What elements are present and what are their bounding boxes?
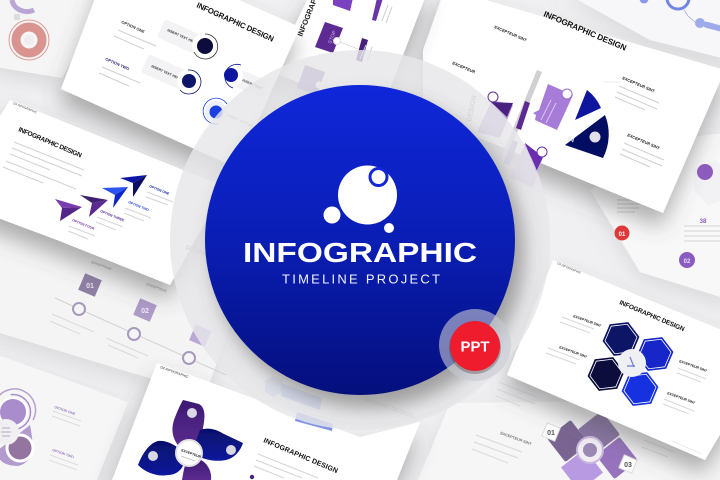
item: insert text four: INSERT TEXT HE: [227, 113, 254, 128]
item: insert text three: [219, 63, 269, 98]
panel: timeline slide: EXCEPTEUR: [91, 260, 113, 271]
timeline captions: [50, 314, 148, 358]
option labels: OPTION TWO: [128, 200, 150, 212]
item: insert text three: INSERT TEXT: [242, 78, 264, 91]
panel: stop slide: [272, 0, 428, 115]
slide label: D4 INFOGRAPHIC: [13, 101, 39, 115]
option labels: OPTION FOUR: [72, 218, 95, 231]
item: insert text two: INSERT TEXT HERE: [151, 64, 182, 81]
title: INFOGRAPHIC: [243, 237, 477, 268]
captions: EXCEPTEUR SINT: [679, 359, 709, 373]
flower diagram: EXCEPTEUR: [181, 448, 202, 459]
heading: excepteur top: EXCEPTEUR SINT: [494, 24, 528, 43]
faded shapes beneath halo: DESIGN: [466, 95, 479, 122]
purple callout upper left: [477, 92, 513, 138]
arrow two: [80, 195, 108, 217]
text: lower pie caption: EXCEPTEUR SINT: [627, 132, 661, 151]
option one text: OPTION ONE: [121, 19, 146, 34]
captions: [559, 314, 709, 405]
panel: flower slide: [112, 363, 420, 480]
option one text: [114, 19, 156, 49]
step badge 01: 01: [86, 283, 94, 290]
circular halo: [170, 50, 550, 430]
panel: right-side light slide: 02: [684, 259, 691, 265]
option two text: [99, 56, 140, 86]
purple callout right: [533, 84, 573, 130]
bullet: [250, 475, 254, 479]
panel: timeline slide: EXCEPTEUR: [146, 282, 168, 293]
panel: hexagon slide: [507, 260, 720, 460]
subtitle: TIMELINE PROJECT: [282, 272, 440, 286]
flower diagram: [138, 400, 243, 480]
petal: left: [138, 441, 184, 476]
top tile: [333, 0, 353, 11]
page mark: [672, 441, 702, 454]
central strip: [497, 70, 542, 170]
text: upper pie caption: EXCEPTEUR SINT: [622, 75, 656, 94]
option labels: OPTION ONE: [149, 184, 171, 196]
panel: right slide with pie chart: [423, 0, 720, 213]
panel: faded top-left slide: [0, 0, 110, 78]
faded shapes beneath halo: RAPHIC: [184, 243, 217, 261]
faded shapes beneath halo: [184, 95, 479, 431]
options text: OPTION TWO: [52, 448, 75, 459]
heading: excepteur left: EXCEPTEUR: [452, 60, 476, 75]
arrow three: [102, 187, 128, 208]
item: insert text one: [157, 19, 218, 59]
captions: EXCEPTEUR SINT: [573, 314, 603, 328]
text block: [3, 142, 84, 189]
faded shapes beneath halo: GRAPHIC DESIGN: [362, 396, 414, 420]
item: insert text one: INSERT TEXT HERE: [167, 28, 198, 45]
badge: PPT: PPT: [460, 338, 490, 356]
badge: PPT: [439, 309, 511, 381]
timeline line: [55, 298, 226, 375]
panel: top-left option slide: [61, 0, 300, 168]
panel: faded bottom-left ring slide: [0, 352, 128, 480]
panel: right-side light slide: [590, 132, 720, 300]
panel: right-side light slide: 01: [619, 232, 626, 238]
item: insert text two: [141, 54, 201, 94]
petal: bottom: [182, 458, 211, 480]
panel: faded squares slide: [418, 382, 720, 480]
petal: right: [195, 429, 243, 461]
step badge 01: [78, 273, 102, 297]
main circle shadow: [212, 96, 524, 408]
pie chart: 04: [566, 136, 575, 145]
squares diagram: 01: [547, 430, 555, 437]
captions: EXCEPTEUR SINT: [667, 391, 697, 405]
step badge 02: 02: [141, 308, 149, 315]
slide title: INFOGRAPHIC DESIGN: [618, 299, 686, 333]
squares diagram: 03: [624, 462, 632, 469]
panel: arrows slide: [0, 100, 225, 285]
petal: top: [172, 400, 204, 448]
main blue circle: [205, 85, 515, 395]
options text: OPTION ONE: [54, 405, 76, 416]
slide title: INFOGRAPHIC DESIGN: [195, 1, 276, 44]
captions: EXCEPTEUR SINT: [559, 345, 589, 359]
caption lines: [546, 317, 706, 414]
purple callout lower left: [509, 143, 547, 188]
options text: [49, 405, 81, 470]
panel: timeline slide: [0, 205, 240, 395]
hexagon diagram: [584, 316, 677, 412]
arrow one: [55, 199, 82, 221]
panel: right-side light slide: 38: [700, 219, 707, 225]
slide label: D4 INFOGRAPHIC: [160, 365, 189, 379]
option text lines: [68, 192, 173, 239]
item: insert text four: [203, 98, 254, 128]
stop tile: STOP: [327, 29, 338, 45]
option labels: [72, 184, 171, 231]
text: lower pie caption: [620, 132, 664, 167]
text: upper pie caption: [603, 75, 659, 110]
slide title: INFOGRAPHIC DESIGN: [262, 437, 339, 475]
icon: bubbles logo: [324, 166, 397, 233]
icon: rings: [0, 389, 36, 466]
slide label: D4 INFOGRAPHIC: [557, 261, 582, 275]
pie chart: [565, 90, 609, 158]
squares diagram: [542, 411, 638, 480]
stop tile: [315, 22, 358, 53]
panel: faded top-right flow slide: [560, 0, 720, 60]
slide title: INFOGRAPHIC DESIGN: [542, 10, 628, 53]
option labels: OPTION THREE: [100, 209, 125, 223]
option two text: OPTION TWO: [105, 56, 130, 71]
timeline nodes: [73, 303, 195, 364]
pill bars: [372, 0, 383, 21]
arrow four: [120, 175, 147, 197]
step badge 02: [133, 298, 157, 322]
panel: faded squares slide: EXCEPTEUR SINT: [500, 431, 533, 446]
body text: [254, 454, 318, 478]
slide title: INFOGRAPHIC DESIGN: [17, 126, 83, 160]
faded stop tile: [297, 65, 325, 95]
